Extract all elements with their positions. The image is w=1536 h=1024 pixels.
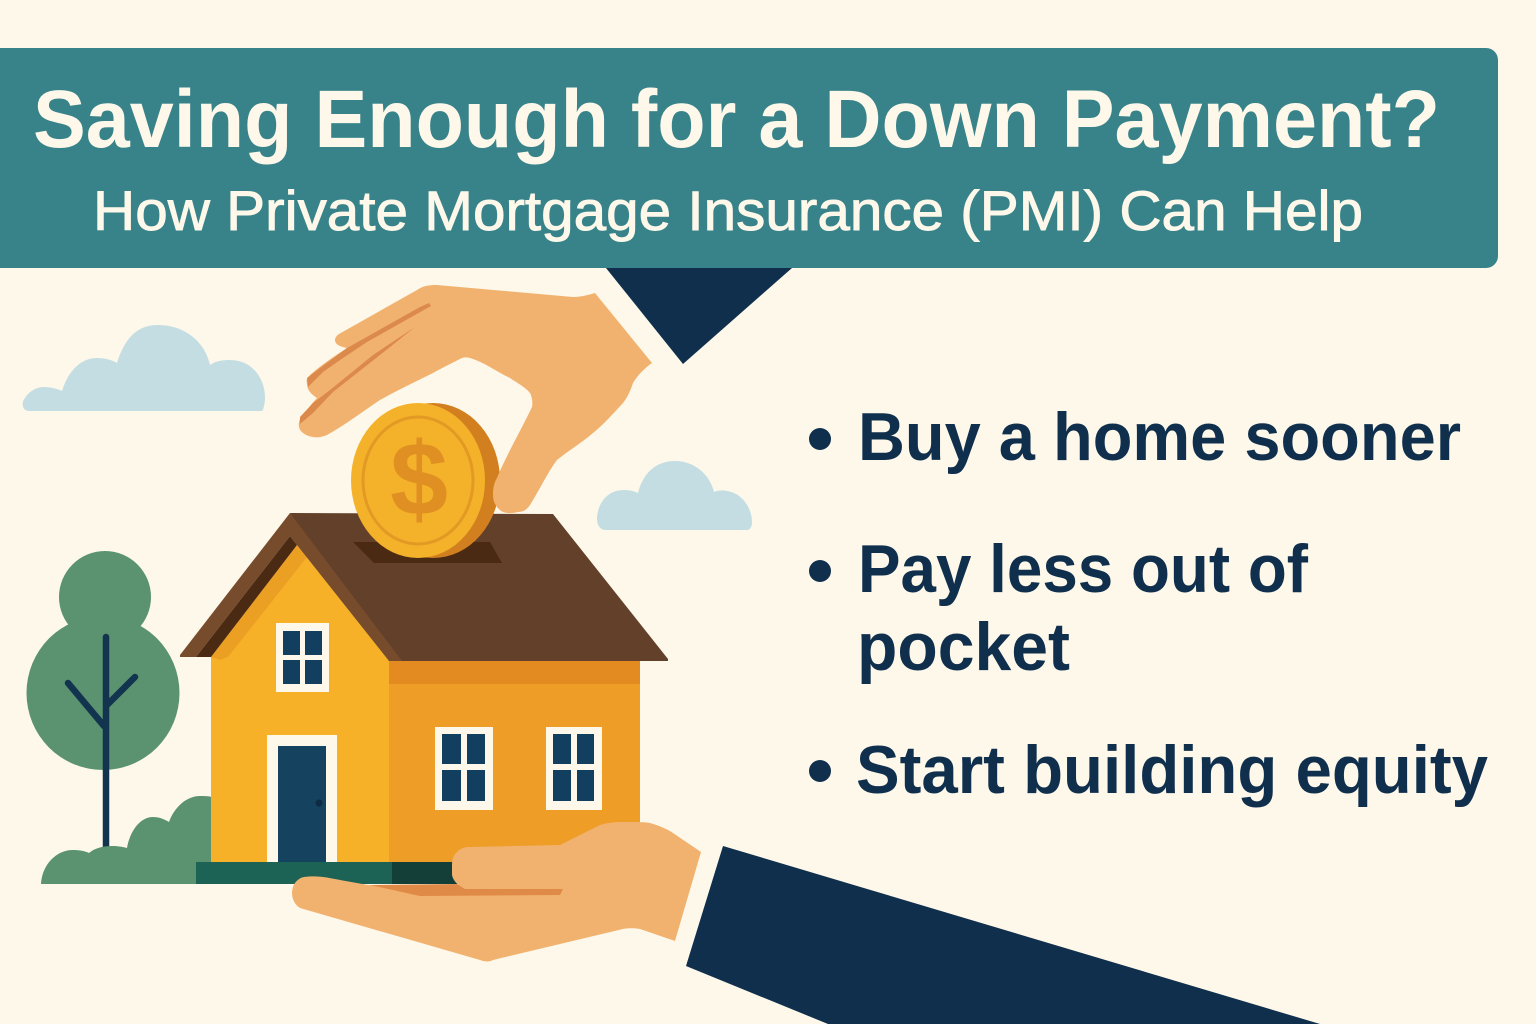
window right	[546, 727, 602, 810]
house right wall	[389, 661, 640, 864]
bullet item: Pay less out of pocket: Pay less out of	[858, 531, 1308, 607]
upper sleeve	[606, 268, 792, 364]
door	[267, 735, 337, 865]
title banner	[0, 48, 1498, 268]
finger crease	[300, 327, 415, 424]
icon: coin	[351, 403, 500, 558]
window middle	[435, 727, 493, 810]
palm crease	[370, 884, 563, 896]
lower sleeve	[686, 846, 1320, 1024]
gable shadow	[211, 545, 307, 660]
icon: coin: $	[390, 422, 448, 538]
icon: tree	[26, 551, 180, 848]
subtitle: How Private Mortgage Insurance (PMI) Can Help	[93, 179, 1363, 242]
ground	[196, 862, 462, 884]
bullet item: Pay less out of pocket	[809, 531, 1308, 685]
roof	[290, 513, 668, 661]
lower hand	[292, 822, 701, 962]
bullet item: Start building equity: Start building equity	[856, 732, 1488, 808]
rafter shadow	[196, 536, 297, 657]
icon: bush	[41, 796, 212, 884]
bullet list	[809, 399, 1488, 808]
icon: small cloud	[597, 461, 752, 530]
house left wall	[211, 545, 390, 864]
roof left rafter	[180, 513, 402, 661]
attic window	[276, 623, 329, 692]
bullet item: Pay less out of pocket: pocket	[857, 609, 1070, 685]
icon: large cloud	[23, 325, 265, 411]
coin slot	[353, 542, 502, 563]
finger crease	[307, 303, 431, 387]
upper hand	[299, 285, 652, 513]
title: Saving Enough for a Down Payment?	[33, 74, 1440, 165]
bullet item: Buy a home sooner: Buy a home sooner	[858, 399, 1461, 475]
illustration: house	[180, 513, 668, 884]
